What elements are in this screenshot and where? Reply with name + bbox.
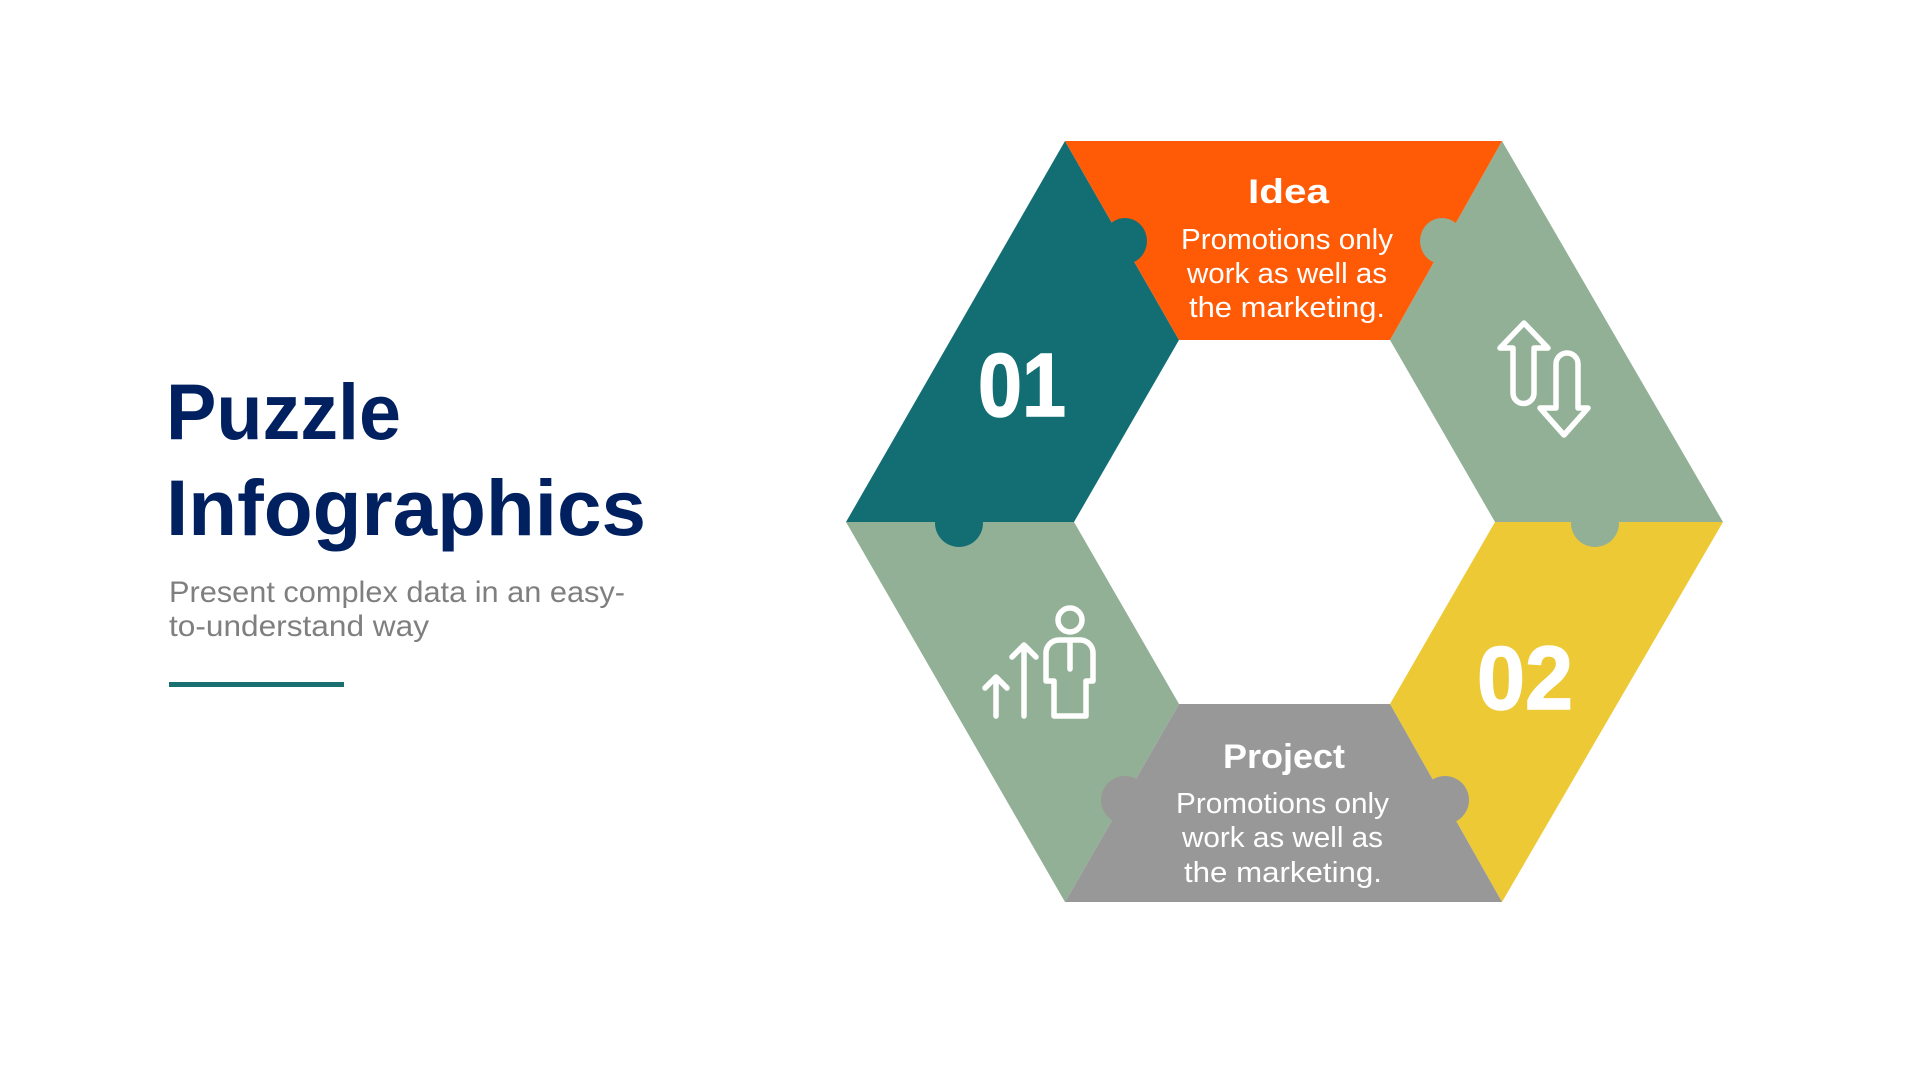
icon: up and down arrows [1500, 323, 1588, 435]
subtitle [169, 576, 625, 643]
number 02: 02 [1477, 629, 1573, 729]
panel: yellow piece 02 [1390, 522, 1723, 902]
subtitle: Present complex data in an easy- [169, 576, 625, 609]
title: Puzzle [166, 367, 401, 456]
panel: green right piece with arrows [1390, 141, 1723, 547]
text block: Project description: work as well as [1181, 822, 1383, 854]
heading: Idea: Idea [1248, 173, 1330, 211]
panel: green left piece with person [846, 522, 1179, 902]
text block: Idea description [1181, 224, 1393, 324]
heading: Project: Project [1223, 738, 1345, 776]
text block: Idea description: Promotions only [1181, 224, 1393, 256]
panel: teal piece 01 [846, 141, 1179, 547]
text block: Idea description: work as well as [1186, 258, 1387, 290]
number 01: 01 [978, 336, 1066, 436]
text block: Project description: the marketing. [1184, 857, 1382, 889]
text block: Project description: Promotions only [1176, 788, 1390, 820]
accent underline [169, 682, 344, 687]
panel: gray Project piece [1065, 704, 1502, 902]
text block: Project description [1176, 788, 1390, 889]
subtitle: to-understand way [169, 610, 429, 643]
text block: Idea description: the marketing. [1189, 292, 1385, 324]
title: Infographics [166, 463, 646, 552]
title [166, 367, 646, 552]
icon: person with growth arrows [985, 608, 1093, 716]
panel: orange Idea piece [1065, 141, 1502, 340]
